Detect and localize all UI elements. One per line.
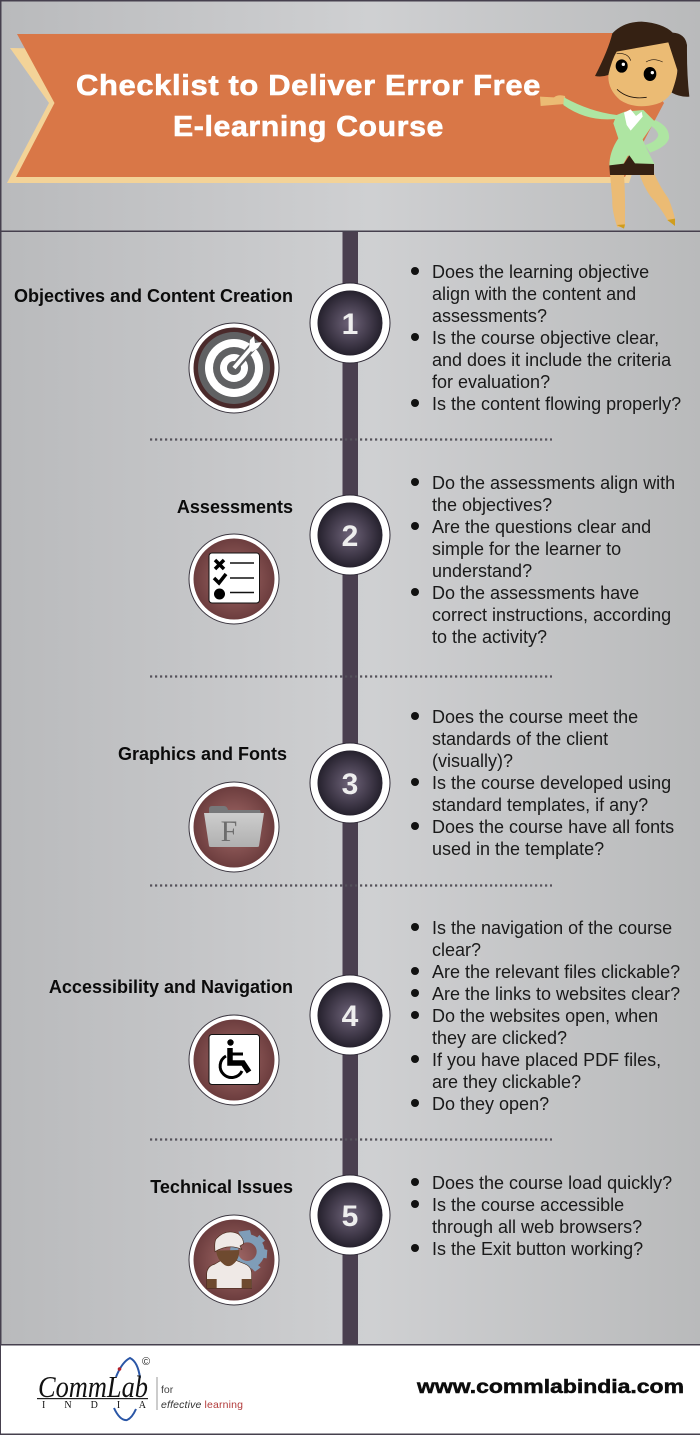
checklist questions: Is the navigation of the course <box>432 918 672 938</box>
presenter character <box>540 22 689 229</box>
website url: www.commlabindia.com <box>416 1377 684 1398</box>
number badge 3: 3 <box>342 768 358 801</box>
icon: technician with gear <box>189 1215 279 1305</box>
checklist questions: to the activity? <box>432 627 547 647</box>
checklist questions: clear? <box>432 940 481 960</box>
checklist questions: Do the assessments have <box>432 583 639 603</box>
checklist questions: assessments? <box>432 306 547 326</box>
checklist questions <box>411 473 675 647</box>
section 4: accessibility and navigation <box>49 918 680 1114</box>
logo: effective learning <box>161 1399 243 1411</box>
checklist questions: Is the course objective clear, <box>432 328 659 348</box>
title: E-learning Course <box>173 111 444 143</box>
checklist questions: and does it include the criteria <box>432 350 672 370</box>
logo: © <box>142 1356 150 1368</box>
number badge 1: 1 <box>342 308 358 341</box>
checklist questions <box>411 262 681 414</box>
checklist questions: Are the relevant files clickable? <box>432 962 680 982</box>
title <box>76 70 541 143</box>
checklist questions: Does the course have all fonts <box>432 817 674 837</box>
checklist questions: Does the course load quickly? <box>432 1173 672 1193</box>
checklist questions: align with the content and <box>432 284 636 304</box>
timeline line <box>342 232 358 1344</box>
checklist questions: (visually)? <box>432 751 513 771</box>
checklist questions: Does the learning objective <box>432 262 649 282</box>
header panel <box>7 22 689 229</box>
checklist questions: Do they open? <box>432 1094 549 1114</box>
checklist questions: Is the Exit button working? <box>432 1239 643 1259</box>
header divider <box>0 230 700 232</box>
checklist questions <box>411 707 674 859</box>
heading: Graphics and Fonts <box>118 744 287 764</box>
icon: wheelchair <box>189 1015 279 1105</box>
checklist questions: If you have placed PDF files, <box>432 1050 661 1070</box>
checklist questions: understand? <box>432 561 532 581</box>
footer <box>0 1344 700 1435</box>
checklist questions: standards of the client <box>432 729 608 749</box>
checklist questions: standard templates, if any? <box>432 795 648 815</box>
icon: target <box>189 323 279 413</box>
logo: I N D I A <box>42 1400 147 1411</box>
number badge 4: 4 <box>342 1000 359 1033</box>
number badge 5 <box>310 1175 390 1255</box>
logo: for <box>161 1384 174 1396</box>
checklist questions: Is the course developed using <box>432 773 671 793</box>
checklist questions <box>411 1173 672 1259</box>
number badge 3 <box>310 743 390 823</box>
checklist questions: used in the template? <box>432 839 604 859</box>
title: Checklist to Deliver Error Free <box>76 70 541 102</box>
checklist questions: Do the assessments align with <box>432 473 675 493</box>
section 1: objectives and content creation <box>14 262 681 414</box>
icon: font folder: F <box>221 815 237 848</box>
checklist questions: Are the links to websites clear? <box>432 984 680 1004</box>
checklist questions: they are clicked? <box>432 1028 567 1048</box>
number badge 5: 5 <box>342 1200 358 1233</box>
checklist questions: Does the course meet the <box>432 707 638 727</box>
section 2: assessments <box>177 473 675 647</box>
number badge 1 <box>310 283 390 363</box>
checklist questions: for evaluation? <box>432 372 550 392</box>
checklist questions: correct instructions, according <box>432 605 671 625</box>
checklist questions: the objectives? <box>432 495 552 515</box>
checklist questions: Is the course accessible <box>432 1195 624 1215</box>
checklist questions: through all web browsers? <box>432 1217 642 1237</box>
heading: Technical Issues <box>150 1177 293 1197</box>
icon: font folder <box>189 782 279 872</box>
logo: CommLab <box>38 1369 148 1404</box>
checklist questions <box>411 918 680 1114</box>
checklist questions: Is the content flowing properly? <box>432 394 681 414</box>
orange ribbon <box>16 33 664 177</box>
number badge 2: 2 <box>342 520 358 553</box>
section 3: graphics and fonts <box>118 707 674 872</box>
checklist questions: are they clickable? <box>432 1072 581 1092</box>
heading: Objectives and Content Creation <box>14 286 293 306</box>
heading: Assessments <box>177 497 293 517</box>
heading: Accessibility and Navigation <box>49 977 293 997</box>
logo <box>37 1356 243 1420</box>
checklist questions: Do the websites open, when <box>432 1006 658 1026</box>
section 5: technical issues <box>150 1173 672 1305</box>
checklist questions: simple for the learner to <box>432 539 621 559</box>
ribbon shadow <box>7 48 640 183</box>
number badge 2 <box>310 495 390 575</box>
icon: checklist <box>189 534 279 624</box>
number badge 4 <box>310 975 390 1055</box>
checklist questions: Are the questions clear and <box>432 517 651 537</box>
